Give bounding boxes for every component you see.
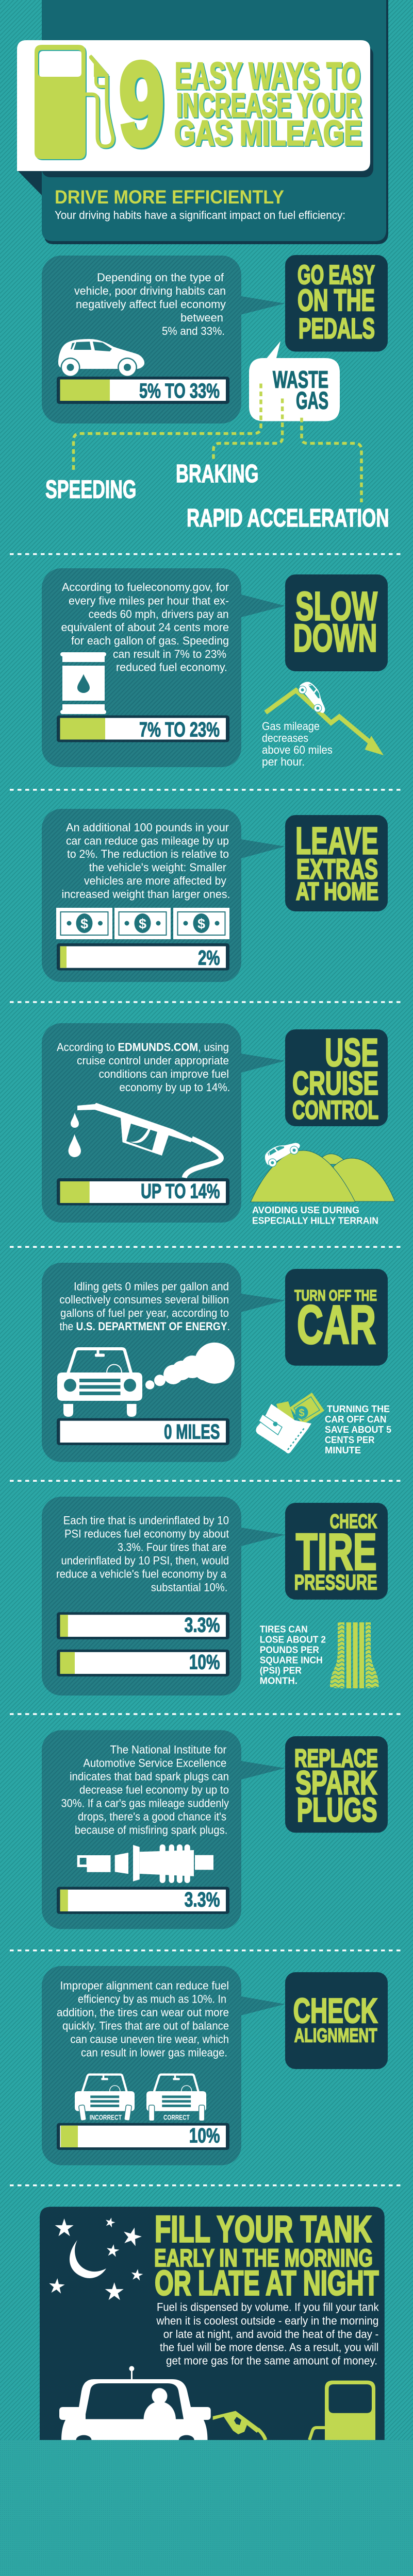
- side note: TIRES CAN: [260, 1624, 308, 1635]
- icon: gas pump: [35, 45, 113, 159]
- body text: vehicles are more affected by: [84, 874, 226, 887]
- body text: quickly. Tires that are out of balance: [62, 2020, 229, 2032]
- title box: SPARK: [295, 1764, 377, 1801]
- dark panel: [40, 2207, 385, 2440]
- bar: 7% to 23%: [57, 715, 229, 742]
- body text: An additional 100 pounds in your: [66, 821, 229, 834]
- body text: 30%. If a car's gas mileage suddenly: [61, 1797, 229, 1809]
- bar: 5% to 33%: 5% TO 33%: [139, 380, 220, 402]
- title box: CAR: [297, 1294, 376, 1355]
- icon: money: $: [80, 916, 88, 931]
- body text: [156, 2301, 379, 2367]
- icon: money: $: [139, 916, 146, 931]
- intro text: Your driving habits have a significant impact on fuel efficiency:: [55, 209, 345, 222]
- title box: TIRE: [296, 1523, 377, 1581]
- title box: PEDALS: [299, 312, 375, 344]
- title box: [285, 1972, 388, 2069]
- panel: slow down: [42, 568, 388, 768]
- body text: negatively affect fuel economy: [76, 298, 226, 311]
- icon: money: [56, 908, 229, 939]
- body text: PSI reduces fuel economy by about: [64, 1527, 229, 1540]
- bar: up to 14%: UP TO 14%: [141, 1180, 220, 1202]
- side note: [252, 1205, 378, 1226]
- body text: cruise control under appropriate: [77, 1054, 229, 1067]
- icon: car front with driver: [59, 2366, 211, 2440]
- body text: for each gallon of gas. Speeding: [71, 634, 229, 647]
- title box: [285, 1269, 388, 1366]
- icon: car on hill: [261, 1136, 303, 1169]
- title box: [285, 574, 388, 671]
- title box: REPLACE: [294, 1744, 378, 1772]
- bubble: [42, 1966, 285, 2165]
- side note: Gas mileage: [262, 720, 320, 733]
- bar: 7% to 23%: 7% TO 23%: [139, 718, 220, 741]
- body text: indicates that bad spark plugs can: [70, 1770, 229, 1783]
- body text: [56, 1514, 229, 1594]
- icon: hills: [251, 1150, 395, 1202]
- icon: moon: [70, 2240, 106, 2278]
- bubble: [42, 256, 285, 423]
- icon: exhaust smoke: [145, 1343, 235, 1389]
- icon: incorrect alignment car: INCORRECT: [90, 2113, 122, 2121]
- label: speeding: SPEEDING: [45, 476, 136, 504]
- bar: 3.3%: 3.3%: [185, 1614, 220, 1636]
- body text: addition, the tires can wear out more: [57, 2006, 229, 2019]
- body text: [61, 1743, 229, 1836]
- bubble: [42, 1263, 285, 1462]
- banner fold: [17, 170, 42, 195]
- icon: tire tread: [330, 1622, 379, 1688]
- icon: car: [58, 339, 144, 377]
- heading: DRIVE MORE EFFICIENTLY: [55, 187, 284, 208]
- body text: [57, 1979, 229, 2059]
- title box: ON THE: [298, 283, 375, 317]
- title box: PRESSURE: [294, 1570, 377, 1594]
- body text: gallons of fuel per year, according to: [60, 1307, 229, 1319]
- body text: reduced fuel economy.: [116, 661, 227, 674]
- title box: TURN OFF THE: [294, 1287, 377, 1304]
- body text: because of misfiring spark plugs.: [75, 1823, 227, 1836]
- bar: 0 miles: 0 MILES: [164, 1421, 220, 1444]
- body text: Idling gets 0 miles per gallon and: [74, 1280, 229, 1293]
- icon: idling car: [57, 1348, 142, 1417]
- connector: braking: [213, 399, 283, 461]
- panel: header: [17, 0, 388, 244]
- title box: USE: [325, 1030, 378, 1075]
- body text: Improper alignment can reduce fuel: [60, 1979, 229, 1992]
- icon: fuel nozzle: [69, 1103, 221, 1178]
- side note: TURNING THE: [327, 1404, 390, 1414]
- side note: (PSI) PER: [260, 1666, 302, 1676]
- callout: waste gas: [249, 341, 340, 421]
- label: braking: BRAKING: [176, 460, 259, 488]
- body text: when it is coolest outside - early in the morning: [156, 2314, 378, 2327]
- bar: 10%: [57, 2123, 229, 2150]
- body text: 5% and 33%.: [162, 325, 225, 337]
- chart: falling arrow: [266, 690, 384, 755]
- callout: waste gas: GAS: [296, 386, 328, 414]
- icon: oil barrel: [60, 652, 106, 714]
- body text: every five miles per hour that ex-: [69, 594, 229, 607]
- side note: MONTH.: [260, 1676, 298, 1686]
- panel: replace spark plugs: [42, 1730, 388, 1929]
- body text: the U.S. DEPARTMENT OF ENERGY.: [60, 1320, 230, 1333]
- bubble: [42, 809, 285, 982]
- body text: can cause uneven tire wear, which: [70, 2033, 229, 2046]
- icon: car on slope: [296, 679, 332, 716]
- body text: can result in 7% to 23%: [113, 648, 226, 660]
- bar: 10%: 10%: [189, 1651, 220, 1673]
- body text: [74, 271, 226, 337]
- body text: [59, 1280, 230, 1333]
- side note: ESPECIALLY HILLY TERRAIN: [252, 1216, 378, 1226]
- side note: [325, 1404, 391, 1455]
- panel: fill your tank: [40, 2207, 385, 2440]
- side note: SQUARE INCH: [260, 1655, 323, 1666]
- heading: [154, 2209, 379, 2303]
- body text: 3.3%. Four tires that are: [118, 1540, 226, 1553]
- icon: correct alignment car: [146, 2074, 206, 2121]
- connector: speeding: [73, 383, 261, 473]
- title box: PLUGS: [297, 1791, 377, 1829]
- side note: [260, 1624, 326, 1686]
- side note: [262, 720, 333, 768]
- body text: increased weight than larger ones.: [62, 888, 230, 901]
- body text: ceeds 60 mph, drivers pay an: [89, 607, 229, 620]
- body text: Depending on the type of: [97, 271, 224, 284]
- banner shadow: [42, 46, 373, 177]
- side note: MINUTE: [325, 1445, 361, 1455]
- body text: the vehicle's weight: Smaller: [89, 861, 226, 874]
- title box: CHECK: [330, 1511, 377, 1533]
- bar: 3.3%: [57, 1887, 229, 1914]
- icon: correct alignment car: CORRECT: [163, 2113, 190, 2121]
- title: GAS MILEAGE: [174, 113, 362, 152]
- icon: money: $: [197, 916, 205, 931]
- panel: go easy on the pedals: [42, 255, 389, 532]
- body text: [57, 1041, 230, 1094]
- body text: get more gas for the same amount of money.: [166, 2354, 377, 2367]
- panel: cruise control: [42, 1023, 395, 1226]
- title box: AT HOME: [296, 878, 378, 906]
- bar: 3.3%: [57, 1612, 229, 1639]
- bubble: [42, 568, 285, 767]
- body text: According to EDMUNDS.COM, using: [57, 1041, 229, 1054]
- title: [174, 56, 362, 152]
- side note: per hour.: [262, 755, 305, 768]
- icon: wallet with money: $: [299, 1408, 305, 1419]
- body text: drops, there's a good chance it's: [78, 1810, 226, 1823]
- side note: LOSE ABOUT 2: [260, 1635, 326, 1645]
- numeral 9: 9: [119, 39, 164, 170]
- bar: 2%: [57, 943, 229, 971]
- side note: SAVE ABOUT 5: [325, 1425, 391, 1435]
- body text: According to fueleconomy.gov, for: [62, 581, 229, 594]
- side note: decreases: [262, 732, 308, 744]
- title box: [285, 1029, 388, 1126]
- bubble: [42, 1730, 285, 1929]
- body text: reduce a vehicle's fuel economy by a: [56, 1568, 227, 1581]
- footer band: [0, 2440, 413, 2576]
- side note: CAR OFF CAN: [325, 1414, 386, 1425]
- icon: wallet with money: [256, 1393, 324, 1453]
- bar: up to 14%: [57, 1178, 229, 1206]
- body text: economy by up to 14%.: [119, 1081, 230, 1094]
- connector: rapid acceleration: [302, 418, 361, 502]
- callout: waste gas: WASTE: [273, 366, 328, 393]
- white banner: [17, 40, 370, 171]
- title box: [285, 255, 388, 351]
- icon: stars: [48, 2216, 144, 2300]
- bar: 2%: 2%: [198, 947, 220, 970]
- side note: above 60 miles: [262, 743, 333, 756]
- bubble: [42, 1497, 285, 1696]
- body text: Automotive Service Excellence: [83, 1756, 226, 1769]
- body text: or late at night, and avoid the heat of the day -: [163, 2328, 378, 2341]
- body text: the fuel will be more dense. As a result, you will: [160, 2341, 378, 2354]
- bar: 3.3%: 3.3%: [185, 1889, 220, 1911]
- body text: Each tire that is underinflated by 10: [63, 1514, 229, 1527]
- bar: 0 miles: [57, 1418, 229, 1445]
- body text: decrease fuel economy by up to: [79, 1783, 229, 1796]
- body text: equivalent of about 24 cents more: [61, 621, 229, 634]
- body text: underinflated by 10 PSI, then, would: [61, 1554, 229, 1567]
- body text: to 2%. The reduction is relative to: [67, 848, 229, 860]
- body text: conditions can improve fuel: [99, 1067, 229, 1080]
- side note: POUNDS PER: [260, 1645, 319, 1655]
- title box: [285, 1503, 388, 1600]
- icon: fuel nozzle and pump: [213, 2381, 375, 2440]
- icon: spark plug: [77, 1844, 213, 1883]
- body text: collectively consumes several billion: [59, 1293, 229, 1306]
- panel: check tire pressure: [42, 1497, 388, 1696]
- body text: [62, 821, 230, 901]
- body text: Fuel is dispensed by volume. If you fill your tank: [157, 2301, 379, 2314]
- panel: check alignment: [42, 1966, 388, 2165]
- bar: 5% to 33%: [57, 377, 229, 404]
- body text: The National Institute for: [110, 1743, 226, 1756]
- icon: incorrect alignment car: [75, 2074, 135, 2121]
- bar: 10%: 10%: [189, 2125, 220, 2147]
- body text: efficiency by as much as 10%. In: [78, 1993, 226, 2006]
- side note: AVOIDING USE DURING: [252, 1205, 359, 1215]
- body text: car can reduce gas mileage by up: [66, 835, 229, 847]
- body text: can result in lower gas mileage.: [81, 2046, 227, 2059]
- title box: ALIGNMENT: [294, 2025, 377, 2046]
- panel: leave extras at home: [42, 809, 388, 982]
- title box: EXTRAS: [296, 853, 378, 885]
- bubble: [42, 1023, 285, 1223]
- bar: 10%: [57, 1650, 229, 1676]
- body text: [61, 581, 229, 674]
- body text: between: [180, 311, 223, 324]
- body text: substantial 10%.: [151, 1581, 227, 1594]
- title box: [285, 815, 388, 911]
- title box: [285, 1736, 388, 1833]
- panel: turn off the car: [42, 1263, 391, 1462]
- body text: vehicle, poor driving habits can: [74, 284, 226, 297]
- side note: CENTS PER: [325, 1435, 374, 1445]
